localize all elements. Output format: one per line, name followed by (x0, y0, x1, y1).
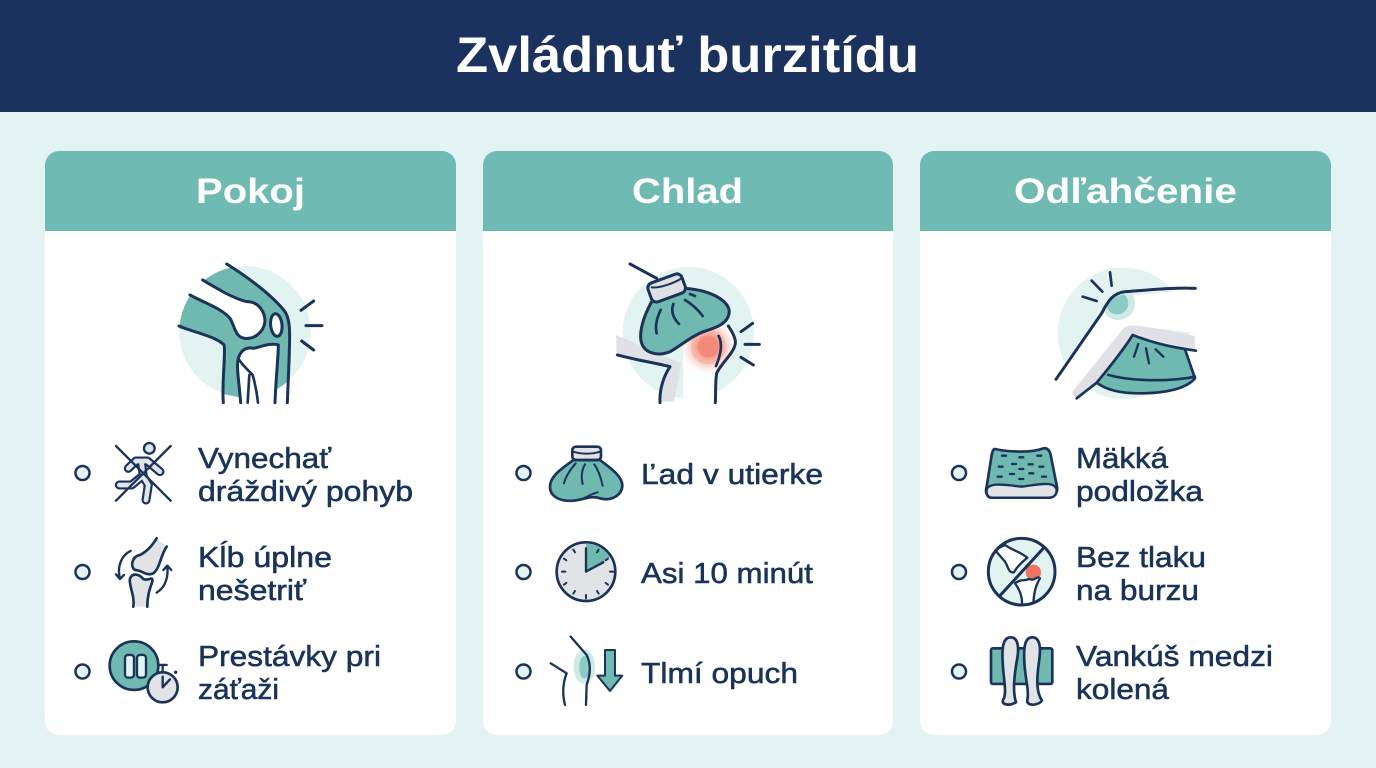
icon: pillow between knees (991, 637, 1052, 705)
heading: Pokoj: Pokoj (196, 172, 305, 211)
text: Kĺb úplne nešetriť (198, 540, 332, 607)
title banner (0, 0, 1376, 112)
text: Tlmí opuch: Tlmí opuch (641, 658, 798, 690)
text: Vynechať dráždivý pohyb: dráždivý pohyb (198, 476, 413, 508)
text: Prestávky pri záťaži: záťaži (198, 674, 279, 706)
text: Vankúš medzi kolená: kolená (1076, 674, 1170, 706)
bullet (76, 565, 90, 579)
text: Vynechať dráždivý pohyb (198, 443, 413, 508)
heading: Chlad: Chlad (632, 172, 743, 211)
icon: ice bag (550, 447, 622, 501)
text: Ľad v utierke: Ľad v utierke (641, 459, 823, 491)
icon: soft foam pad (986, 448, 1057, 498)
title: Zvládnuť burzitídu (456, 27, 919, 83)
icon: knee joint (170, 257, 322, 403)
text: Bez tlaku na burzu: Bez tlaku (1076, 542, 1206, 574)
bullet (516, 664, 530, 678)
text: Prestávky pri záťaži: Prestávky pri (198, 641, 381, 673)
text: Asi 10 minút: Asi 10 minút (641, 558, 813, 590)
text: Vankúš medzi kolená: Vankúš medzi (1076, 641, 1273, 673)
bullet (516, 466, 530, 480)
icon: pause with stopwatch (110, 641, 178, 702)
text: Vankúš medzi kolená (1076, 641, 1273, 706)
icon: elbow on cushion (1056, 268, 1198, 399)
panel: Chlad (483, 151, 893, 735)
text: Kĺb úplne nešetriť: nešetriť (198, 575, 307, 607)
icon: clock 10 minutes (557, 542, 615, 601)
bullet (952, 466, 966, 480)
text: Mäkká podložka: Mäkká (1076, 443, 1169, 475)
icon: no irritating movement (116, 443, 171, 501)
icon: no pressure on bursa (988, 538, 1055, 608)
panel: Odľahčenie (920, 151, 1331, 735)
bullet (952, 565, 966, 579)
text: Vynechať dráždivý pohyb: Vynechať (198, 443, 332, 475)
text: Bez tlaku na burzu (1076, 542, 1206, 607)
text: Kĺb úplne nešetriť: Kĺb úplne (198, 540, 332, 574)
text: Mäkká podložka (1076, 443, 1204, 508)
heading: Odľahčenie: Odľahčenie (1014, 172, 1237, 211)
bullet (952, 664, 966, 678)
bullet (516, 565, 530, 579)
icon: joint movement (116, 538, 171, 607)
text: Mäkká podložka: podložka (1076, 476, 1204, 508)
bullet (76, 466, 90, 480)
panel: Pokoj (45, 151, 456, 735)
text: Bez tlaku na burzu: na burzu (1076, 575, 1199, 607)
text: Prestávky pri záťaži (198, 641, 381, 706)
icon: ice bag on knee (616, 264, 759, 403)
icon: reduced swelling (551, 637, 622, 705)
bullet (76, 664, 90, 678)
